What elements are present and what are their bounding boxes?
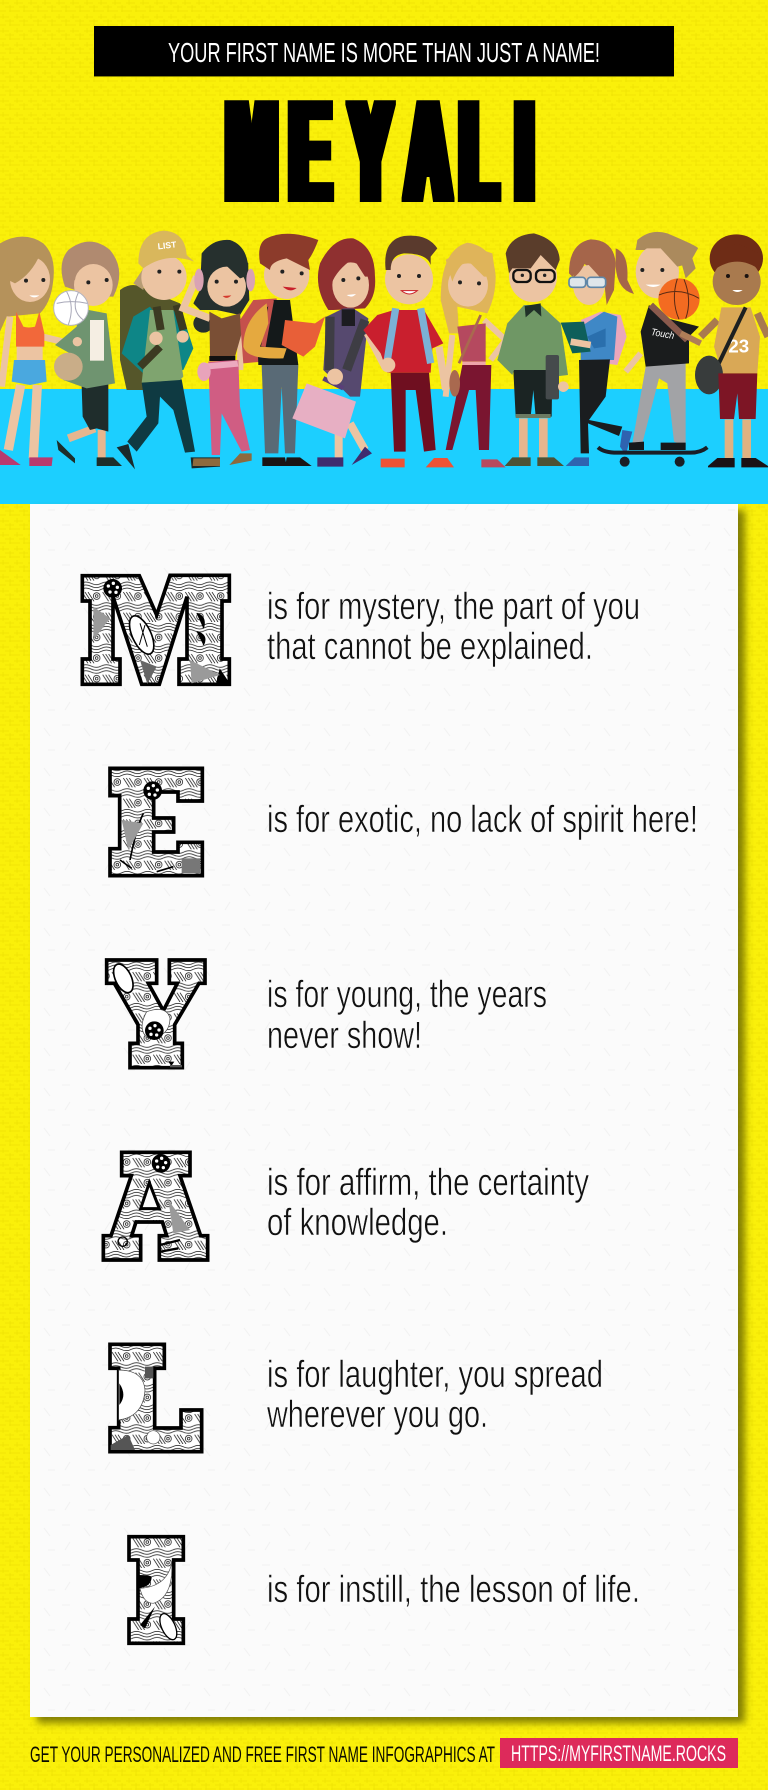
person: boy with red book: [240, 234, 325, 466]
text: is for mystery: that cannot be explained.: [267, 626, 593, 668]
letter Y illustration: [107, 960, 205, 1068]
text: is for laughter: [266, 1354, 603, 1436]
text: is for young: never show!: [267, 1015, 422, 1057]
letter A illustration: [103, 1152, 208, 1260]
text: is for instill: is for instill, the lesson of life.: [267, 1569, 640, 1611]
white content panel: [30, 504, 738, 1717]
title: name: MEYALI: [227, 72, 533, 231]
text: is for affirm: of knowledge.: [267, 1202, 448, 1244]
person: blonde girl: [441, 243, 506, 467]
person: girl in green jacket with volleyball: [54, 242, 122, 466]
person: girl with headphones: [183, 240, 255, 466]
person: skateboarder with basketball: Touch: [650, 327, 675, 342]
top banner: [94, 26, 674, 77]
person: girl in orange top: [0, 237, 77, 466]
text: is for mystery: [267, 586, 640, 668]
letter E illustration: [110, 768, 202, 876]
illustration: group of young people, left half: [0, 231, 375, 469]
text: is for laughter: is for laughter, you spread: [267, 1354, 603, 1396]
text: is for young: is for young, the years: [267, 974, 547, 1016]
person: skateboarder with basketball: [598, 232, 707, 467]
person: backpacker in cap: LIST: [157, 239, 178, 251]
person: boy in basketball tank: [695, 234, 768, 467]
text: is for young: [267, 974, 547, 1057]
text: is for affirm: is for affirm, the certainty: [267, 1162, 589, 1204]
person: girl with ponytail and tablet: [561, 239, 634, 466]
illustration band: blue floor: [0, 389, 768, 504]
person: backpacker in cap: [117, 231, 220, 469]
letter L illustration: [110, 1344, 202, 1452]
person: boy with glasses and laptop: [497, 233, 569, 466]
letter I illustration: [129, 1537, 183, 1643]
text: is for laughter: wherever you go.: [266, 1394, 488, 1436]
illustration: group of young people, right half: [363, 232, 768, 467]
person: boy in red shirt: [363, 236, 454, 467]
text: is for mystery: is for mystery, the part of you: [267, 586, 640, 628]
footer call to action: GET YOUR PERSONALIZED AND FREE FIRST NAME INFOGRAPHICS AT: [30, 1742, 495, 1767]
person: boy in basketball tank: 23: [728, 335, 749, 356]
letter M illustration: [82, 575, 229, 684]
text: is for affirm: [267, 1162, 589, 1244]
person: girl with pink handbag: [292, 238, 375, 467]
